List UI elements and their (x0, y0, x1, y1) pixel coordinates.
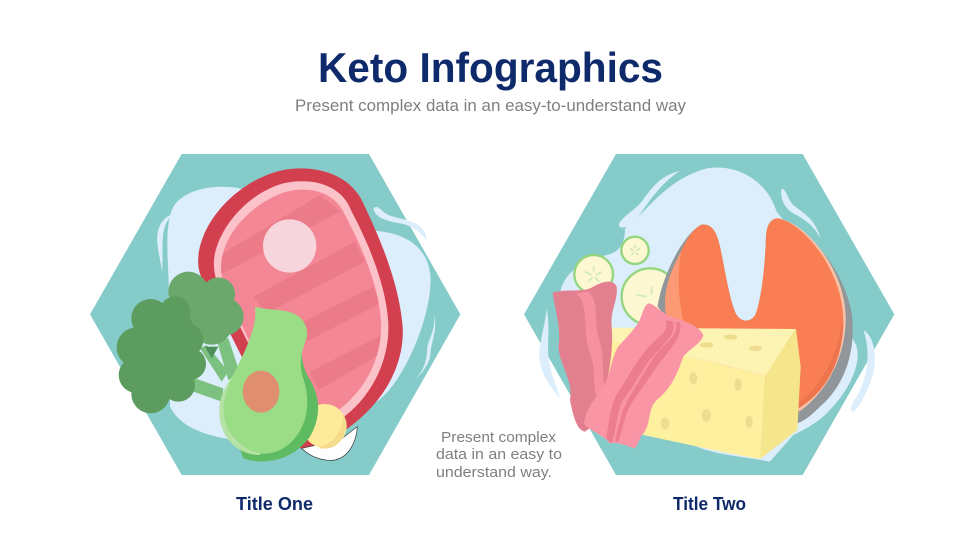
egg white (302, 427, 357, 460)
plate splash (560, 167, 858, 462)
icon: avocado (219, 307, 318, 462)
salmon skin (658, 218, 853, 423)
broccoli back floret (168, 272, 244, 345)
cheese top (607, 328, 796, 376)
salmon body (665, 218, 843, 408)
icon: broccoli (117, 272, 244, 413)
avocado skin (237, 337, 318, 462)
splash strokes (157, 207, 435, 437)
steak rim (198, 168, 403, 448)
steak fat (214, 181, 388, 420)
steak stripes (220, 195, 382, 390)
body text: understand way. (436, 464, 552, 481)
icon: cheese wedge (607, 328, 801, 459)
bacon front stripes (606, 320, 674, 443)
icon: salmon steak (658, 218, 853, 423)
steak meat (221, 190, 381, 414)
title: Keto Infographics (318, 44, 663, 91)
egg yolk (303, 404, 347, 448)
hexagon background (524, 154, 894, 475)
hexagon background (90, 154, 460, 475)
broccoli front floret (117, 296, 206, 413)
icon: cucumber slices (574, 237, 678, 325)
panel: meat and avocado hexagon (90, 154, 460, 475)
broccoli stems (217, 338, 240, 380)
steak bone (263, 219, 316, 273)
avocado light edge (219, 357, 280, 455)
salmon edge (777, 218, 846, 412)
icon: bacon strips (553, 282, 703, 448)
bacon back strip (553, 282, 620, 432)
panel: salmon and cheese hexagon (524, 154, 894, 475)
subtitle: Present complex data in an easy-to-understand way (295, 96, 686, 115)
bacon back highlight (577, 292, 605, 398)
cheese side (760, 329, 801, 459)
salmon light side (665, 250, 683, 327)
avocado flesh (224, 307, 307, 454)
label: title two: Title Two (673, 494, 746, 514)
bacon front strip (584, 303, 703, 448)
plate splash (167, 187, 431, 439)
splash strokes (539, 171, 875, 412)
icon: egg (302, 404, 357, 460)
label: title one: Title One (236, 494, 313, 514)
body text (436, 429, 562, 481)
body text: Present complex (441, 429, 557, 446)
icon: steak (198, 168, 403, 448)
body text: data in an easy to (436, 446, 562, 463)
cheese holes (661, 334, 762, 429)
cheese front (607, 328, 765, 459)
avocado pit (243, 371, 279, 413)
salmon dark edge (798, 320, 843, 408)
